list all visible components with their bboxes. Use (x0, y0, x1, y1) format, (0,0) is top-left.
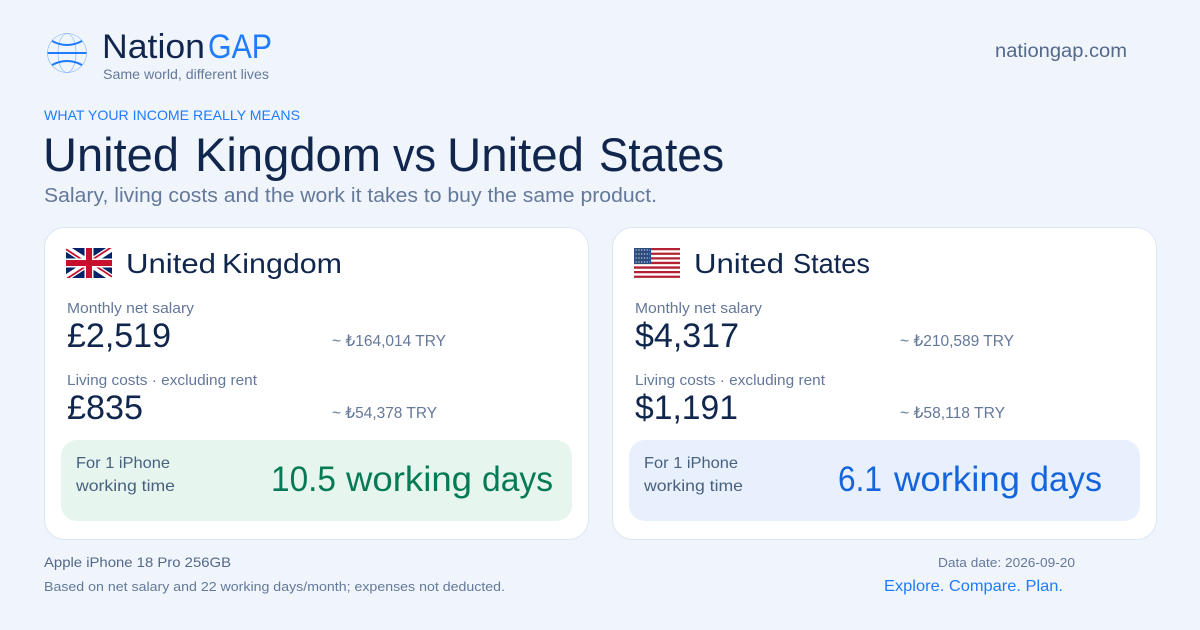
title: United (447, 128, 584, 181)
callout: working time: For 1 iPhone (644, 455, 738, 472)
title: States (599, 128, 724, 181)
living costs in TRY: ~ ₺58,118 TRY (900, 405, 1005, 422)
callout: working time: days (1030, 460, 1102, 499)
salary label: Monthly net salary (67, 300, 195, 317)
subtitle: Salary, living costs and the work it takes to buy the same product. (44, 185, 657, 207)
data date: Data date: 2026-09-20 (938, 555, 1075, 570)
callout: working time: 10.5 (271, 460, 336, 499)
salary value: $4,317 (635, 317, 739, 355)
callout: working time: For 1 iPhone (76, 455, 170, 472)
country name: States (793, 248, 870, 279)
country name (126, 248, 342, 279)
living costs label: Living costs · excluding rent (635, 372, 826, 389)
callout: working time: working time (643, 478, 743, 495)
brand name (102, 28, 272, 66)
brand name: Nation (102, 28, 205, 66)
salary value: £2,519 (67, 317, 171, 355)
panel: United Kingdom (44, 228, 588, 540)
salary label: Monthly net salary (635, 300, 763, 317)
call to action: Explore. Compare. Plan. (884, 578, 1063, 595)
callout: working time: working (345, 460, 472, 499)
salary in TRY: ~ ₺164,014 TRY (332, 333, 446, 350)
country name: United (126, 248, 216, 279)
icon: US flag (634, 248, 680, 278)
tagline: Same world, different lives (103, 66, 269, 82)
callout: working time: working time (75, 478, 175, 495)
icon: UK flag (66, 247, 112, 279)
callout: working time: days (482, 460, 553, 499)
title: vs (393, 128, 436, 181)
icon: globe (48, 34, 86, 72)
product name: Apple iPhone 18 Pro 256GB (44, 554, 231, 570)
living costs value: £835 (67, 389, 143, 427)
footnote: Based on net salary and 22 working days/month; expenses not deducted. (44, 579, 505, 594)
living costs in TRY: ~ ₺54,378 TRY (332, 405, 437, 422)
country name (694, 248, 870, 279)
eyebrow: WHAT YOUR INCOME REALLY MEANS (44, 107, 300, 123)
title: Kingdom (195, 128, 381, 181)
salary in TRY: ~ ₺210,589 TRY (900, 333, 1014, 350)
callout: working time (61, 440, 572, 521)
panel: United States (612, 228, 1156, 540)
country name: Kingdom (222, 248, 342, 279)
site url: nationgap.com (995, 41, 1127, 62)
title: United (43, 128, 179, 181)
callout: working time (629, 440, 1140, 521)
logo (48, 28, 272, 82)
callout: working time: working (893, 460, 1020, 499)
living costs value: $1,191 (635, 389, 738, 427)
country name: United (694, 248, 784, 279)
callout: working time: 6.1 (838, 460, 882, 499)
title (43, 128, 724, 181)
brand name: GAP (208, 28, 272, 66)
living costs label: Living costs · excluding rent (67, 372, 258, 389)
